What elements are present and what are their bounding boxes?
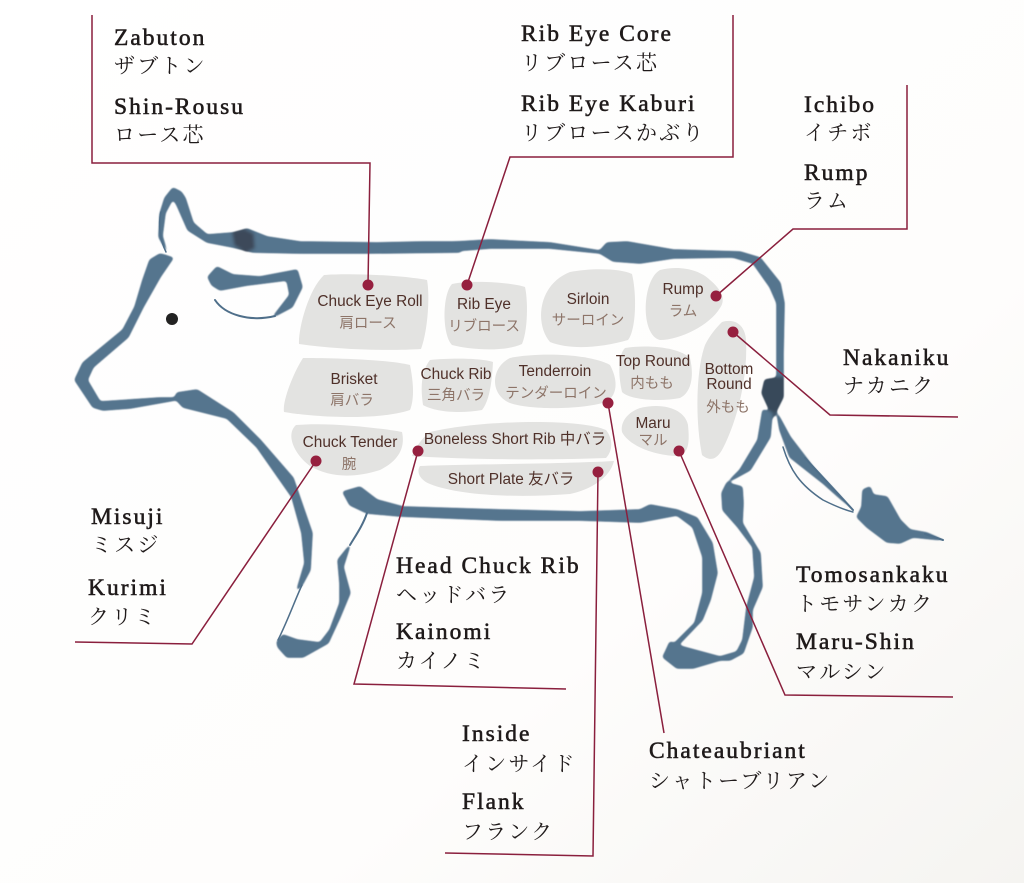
label: rib eye: Rib Eye xyxy=(457,296,511,313)
label: bottom round: 外もも xyxy=(706,399,750,416)
brush shapes xyxy=(75,188,943,668)
callout: tomosankaku, maru-shin: マルシン xyxy=(796,660,888,684)
label: chuck tender: Chuck Tender xyxy=(303,434,397,451)
label: chuck tender: 腕 xyxy=(342,456,356,473)
line: rib eye xyxy=(467,15,733,285)
hip knot xyxy=(762,377,783,417)
label: sirloin: サーロイン xyxy=(552,313,624,329)
eye xyxy=(166,313,178,325)
label: short plate: Short Plate 友バラ xyxy=(448,470,574,488)
callout: misuji, kurimi: Misuji xyxy=(91,504,164,530)
back xyxy=(440,240,784,377)
label: rib eye xyxy=(448,296,520,335)
line: zabuton xyxy=(92,15,370,285)
callout: nakaniku: ナカニク xyxy=(843,374,935,398)
label: tenderloin: テンダーロイン xyxy=(505,385,607,402)
tail tuft xyxy=(857,487,943,543)
label: brisket: 肩バラ xyxy=(330,393,374,409)
callout: inside, flank: フランク xyxy=(462,820,554,844)
callout: misuji, kurimi xyxy=(88,504,168,629)
label: chuck rib: 三角バラ xyxy=(427,387,485,404)
label: rump: Rump xyxy=(662,281,704,298)
label: maru xyxy=(635,415,671,449)
label: brisket: Brisket xyxy=(330,371,378,388)
callout: chateaubriant xyxy=(649,738,831,793)
label: sirloin xyxy=(552,291,624,329)
belly xyxy=(343,487,717,643)
face and muzzle xyxy=(75,254,175,410)
region: chuck rib xyxy=(422,359,493,412)
callout: ichibo, rump: Ichibo xyxy=(804,92,876,118)
callout: tomosankaku, maru-shin: Tomosankaku xyxy=(796,562,950,588)
label: chuck rib xyxy=(420,366,492,404)
callout: head chuck rib, kainomi: Kainomi xyxy=(396,619,492,645)
region: brisket xyxy=(284,358,413,417)
line: misuji xyxy=(75,461,316,644)
label: boneless short rib: Boneless Short Rib 中バラ xyxy=(424,430,606,448)
region: top round xyxy=(619,346,692,400)
label: brisket xyxy=(330,371,378,409)
callout: chateaubriant: シャトーブリアン xyxy=(649,769,831,793)
region: boneless short rib xyxy=(412,422,611,459)
thin strokes xyxy=(160,212,943,640)
line: ichibo xyxy=(716,85,907,296)
cut regions xyxy=(284,268,746,496)
callout: zabuton, shin-rousu: ロース芯 xyxy=(114,123,206,147)
label: chuck eye roll xyxy=(317,293,423,332)
callout: ichibo, rump: イチボ xyxy=(804,121,874,145)
collar stroke xyxy=(208,267,302,317)
callout: head chuck rib, kainomi xyxy=(396,553,581,673)
callout: rib eye core, rib eye kaburi: Rib Eye Core xyxy=(521,21,673,47)
callout: misuji, kurimi: クリミ xyxy=(88,605,158,629)
shoulder knot xyxy=(233,230,254,251)
region: sirloin xyxy=(541,269,635,347)
region: tenderloin xyxy=(495,355,616,408)
callout: rib eye core, rib eye kaburi xyxy=(521,21,706,145)
dots xyxy=(310,280,738,478)
callout: nakaniku xyxy=(843,345,950,398)
callout: ichibo, rump: ラム xyxy=(804,189,850,213)
callout: inside, flank: インサイド xyxy=(462,752,577,776)
tail xyxy=(777,413,853,510)
region: rib eye xyxy=(444,282,527,349)
line: nakaniku xyxy=(733,332,958,417)
callout: zabuton, shin-rousu: Zabuton xyxy=(114,25,206,51)
upper hind leg xyxy=(728,410,772,482)
callout: inside, flank xyxy=(462,721,577,844)
callout: chateaubriant: Chateaubriant xyxy=(649,738,807,764)
label: bottom round xyxy=(705,361,753,416)
callout: inside, flank: Inside xyxy=(462,721,531,747)
callout: misuji, kurimi: Kurimi xyxy=(88,575,168,601)
label: tenderloin: Tenderroin xyxy=(519,363,591,380)
region: chuck tender xyxy=(291,424,403,476)
callout: tomosankaku, maru-shin xyxy=(796,562,950,684)
label: bottom round: Bottom xyxy=(705,361,753,378)
label: maru: Maru xyxy=(635,415,671,432)
line: chateaubriant xyxy=(608,403,664,733)
label: sirloin: Sirloin xyxy=(567,291,609,308)
region: bottom round xyxy=(697,321,746,459)
callout: head chuck rib, kainomi: カイノミ xyxy=(396,649,487,673)
label: maru: マル xyxy=(638,433,668,449)
front leg xyxy=(278,477,312,590)
hind foot and leg xyxy=(663,483,762,668)
callout: zabuton, shin-rousu: ザブトン xyxy=(114,54,207,78)
front foot xyxy=(277,545,350,657)
callout: zabuton, shin-rousu: Shin-Rousu xyxy=(114,94,245,120)
region: rump xyxy=(646,268,723,340)
callout: nakaniku: Nakaniku xyxy=(843,345,950,371)
region: maru xyxy=(622,406,689,456)
callout: head chuck rib, kainomi: ヘッドバラ xyxy=(396,583,512,607)
label: bottom round: Round xyxy=(706,376,752,393)
label: chuck eye roll: 肩ロース xyxy=(339,316,397,332)
label: top round: 内もも xyxy=(630,375,674,392)
label: tenderloin xyxy=(505,363,607,402)
region: short plate xyxy=(418,461,614,496)
callout: rib eye core, rib eye kaburi: Rib Eye Kaburi xyxy=(521,91,696,117)
line: head chuck rib xyxy=(354,451,566,689)
line: inside xyxy=(445,472,598,856)
label: rump: ラム xyxy=(669,304,697,320)
label: top round xyxy=(616,353,690,392)
label: rib eye: リブロース xyxy=(448,317,520,335)
callout: rib eye core, rib eye kaburi: リブロースかぶり xyxy=(521,121,706,145)
callout: ichibo, rump: Rump xyxy=(804,160,869,186)
label: top round: Top Round xyxy=(616,353,690,370)
callout: zabuton, shin-rousu xyxy=(114,25,245,147)
cut labels xyxy=(303,281,753,488)
callout: ichibo, rump xyxy=(804,92,876,213)
label: chuck eye roll: Chuck Eye Roll xyxy=(317,293,423,310)
callout: inside, flank: Flank xyxy=(462,789,526,815)
label: chuck rib: Chuck Rib xyxy=(420,366,492,383)
ear and shoulder xyxy=(159,188,460,253)
line: tomosankaku xyxy=(679,451,953,697)
region: chuck eye roll xyxy=(299,274,428,350)
callout: tomosankaku, maru-shin: Maru-Shin xyxy=(796,629,916,655)
chest xyxy=(175,390,293,478)
callout: rib eye core, rib eye kaburi: リブロース芯 xyxy=(521,51,659,75)
callout: misuji, kurimi: ミスジ xyxy=(91,533,161,557)
label: chuck tender xyxy=(303,434,397,473)
cow outline xyxy=(75,188,943,668)
label: rump xyxy=(662,281,704,320)
callout: head chuck rib, kainomi: Head Chuck Rib xyxy=(396,553,581,579)
callout: tomosankaku, maru-shin: トモサンカク xyxy=(796,592,934,616)
